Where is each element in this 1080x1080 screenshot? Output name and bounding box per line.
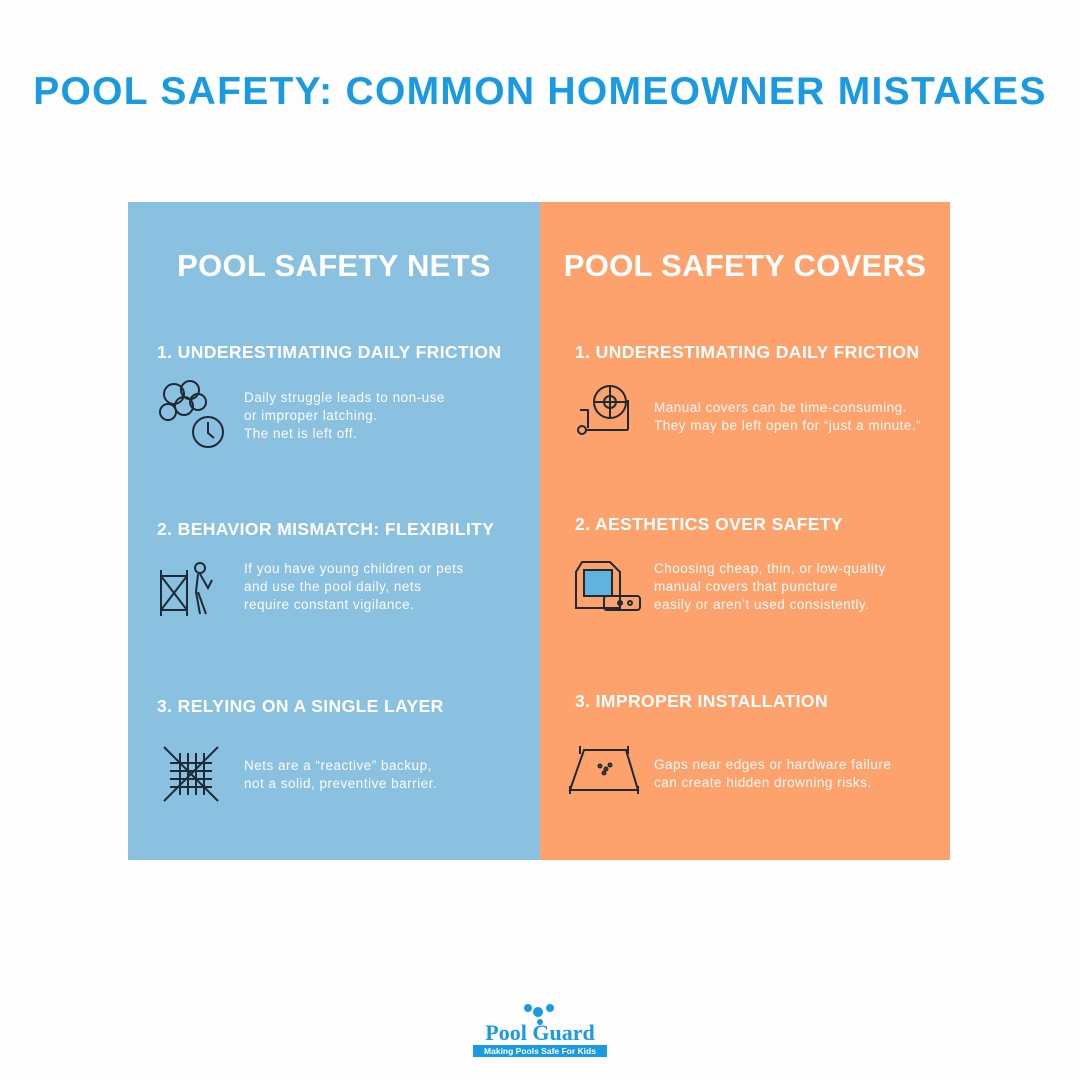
subheading 2: 2. BEHAVIOR MISMATCH: FLEXIBILITY — [157, 519, 494, 539]
text 2: If you have young children or pets — [244, 561, 464, 576]
text 1: Daily struggle leads to non-use — [244, 390, 445, 405]
icon: gate and person — [160, 562, 213, 616]
panel: nets — [128, 202, 540, 860]
logo text: Pool Guard — [485, 1020, 595, 1045]
subheading 3: 3. IMPROPER INSTALLATION — [575, 691, 828, 711]
text 1: The net is left off. — [244, 426, 357, 441]
text 2: Choosing cheap, thin, or low-quality — [654, 561, 886, 576]
subheading 1: 1. UNDERESTIMATING DAILY FRICTION — [157, 342, 501, 362]
heading: nets: POOL SAFETY NETS — [177, 248, 491, 283]
text 2 — [244, 561, 464, 612]
text 3: not a solid, preventive barrier. — [244, 776, 437, 791]
text 3 — [654, 757, 891, 790]
text 2: and use the pool daily, nets — [244, 579, 421, 594]
icon: pool with cover — [575, 561, 641, 611]
text 1: Manual covers can be time-consuming. — [654, 400, 907, 415]
text 2: manual covers that puncture — [654, 579, 838, 594]
icon: tangled net with clock — [159, 380, 224, 448]
subheading 1: 1. UNDERESTIMATING DAILY FRICTION — [575, 342, 919, 362]
text 2: easily or aren’t used consistently. — [654, 597, 869, 612]
title: POOL SAFETY: COMMON HOMEOWNER MISTAKES — [33, 70, 1047, 113]
subheading 3: 3. RELYING ON A SINGLE LAYER — [157, 696, 444, 716]
icon: splash — [524, 1004, 554, 1025]
text 1: or improper latching. — [244, 408, 378, 423]
text 1: They may be left open for “just a minute.” — [654, 418, 921, 433]
text 3: Gaps near edges or hardware failure — [654, 757, 891, 772]
text 3: Nets are a “reactive” backup, — [244, 758, 432, 773]
subheading 2: 2. AESTHETICS OVER SAFETY — [575, 514, 843, 534]
tagline — [473, 1045, 607, 1057]
text 3 — [244, 758, 437, 791]
text 2 — [654, 561, 886, 612]
text 3: can create hidden drowning risks. — [654, 775, 872, 790]
text 1 — [244, 390, 445, 441]
logo — [473, 1004, 607, 1057]
panel: covers — [540, 202, 950, 860]
icon: crossed net — [163, 746, 219, 802]
heading: covers: POOL SAFETY COVERS — [564, 248, 926, 283]
text 2: require constant vigilance. — [244, 597, 414, 612]
icon: cover frame with gaps — [568, 746, 640, 794]
tagline: Making Pools Safe For Kids — [484, 1046, 596, 1056]
icon: cover reel — [577, 385, 629, 435]
text 1 — [654, 400, 921, 433]
